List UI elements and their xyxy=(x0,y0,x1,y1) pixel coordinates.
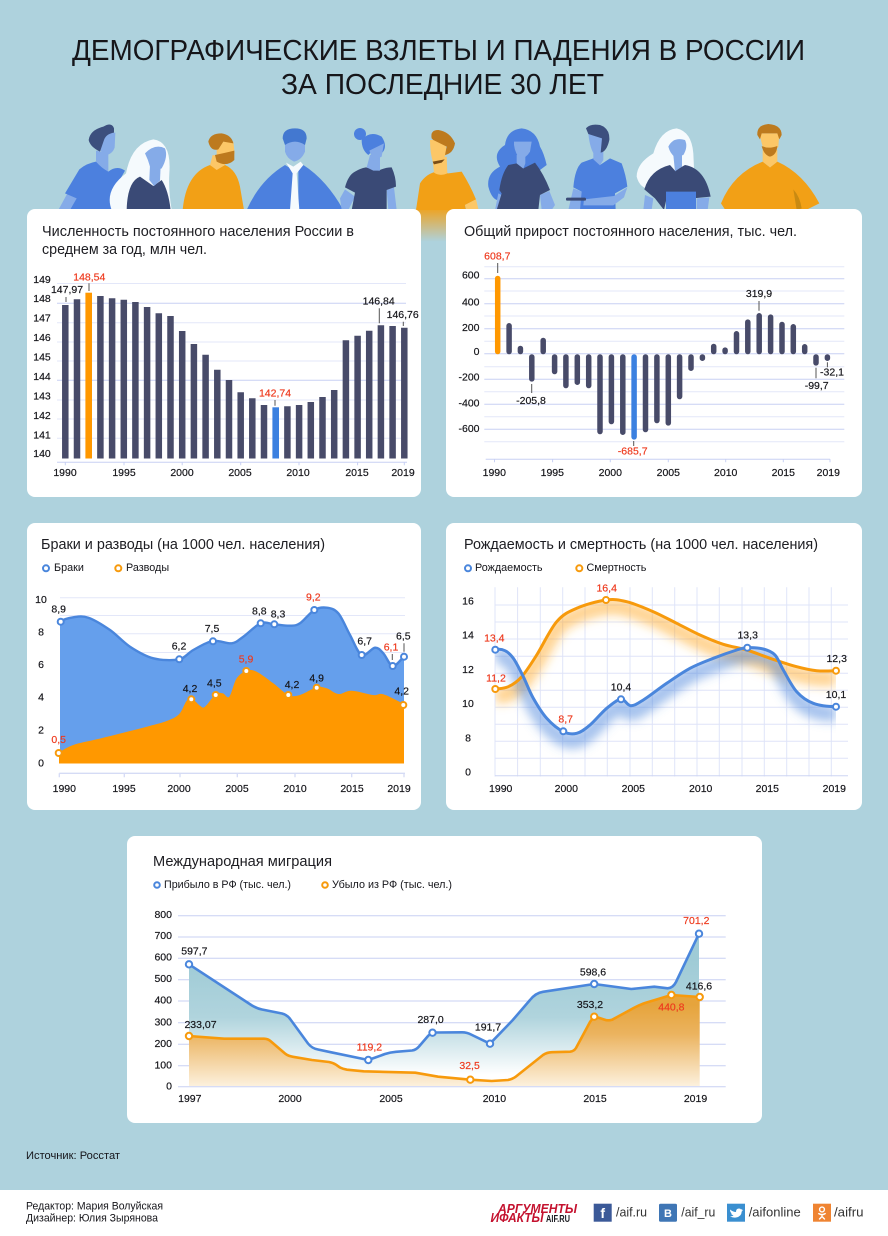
title xyxy=(72,35,805,101)
y axis labels: international migration: 400 xyxy=(154,995,172,1007)
x labels: birth and death rate xyxy=(489,783,846,795)
y axis labels: birth and death rate: 12 xyxy=(462,664,474,676)
legend: birth and death rate xyxy=(465,562,647,574)
y axis labels: population: 143 xyxy=(33,390,51,402)
handle: twitter: /aifonline xyxy=(749,1204,801,1220)
data labels: population: 146,76 xyxy=(387,309,419,321)
data labels: international migration: 597,7 xyxy=(181,946,208,958)
y axis labels: total growth: 400 xyxy=(462,296,480,308)
y axis labels: population: 140 xyxy=(33,448,51,460)
data labels: marriages and divorces: 4,2 xyxy=(285,679,299,691)
bar: 2008 minimum xyxy=(272,407,279,458)
data labels: marriages and divorces: 0,5 xyxy=(51,734,66,746)
y axis labels: international migration: 500 xyxy=(154,973,172,985)
data labels: population: 148,54 xyxy=(73,272,106,284)
y axis labels: total growth: -400 xyxy=(458,397,480,409)
footer xyxy=(0,1190,888,1236)
icon: facebook xyxy=(594,1204,612,1222)
person 2 xyxy=(110,139,172,210)
y axis labels: population: 144 xyxy=(33,371,51,383)
grid: total growth xyxy=(484,267,844,442)
data labels: population: 146,84 xyxy=(363,296,395,308)
x labels: international migration: 1997 xyxy=(178,1093,202,1105)
x labels: population: 1990 xyxy=(53,467,77,479)
x labels: birth and death rate: 2015 xyxy=(756,783,779,795)
data labels: total growth: 319,9 xyxy=(746,288,772,300)
grid: international migration xyxy=(178,916,726,1087)
y axis labels: international migration: 600 xyxy=(154,952,172,964)
y axis labels: population: 141 xyxy=(33,430,51,442)
data labels: birth and death rate: 12,3 xyxy=(826,653,847,665)
x labels: population: 2010 xyxy=(286,467,310,479)
data labels: marriages and divorces: 7,5 xyxy=(205,623,219,635)
data labels: birth and death rate: 13,4 xyxy=(484,632,505,644)
y axis labels: international migration: 100 xyxy=(154,1060,172,1072)
heading: total growth: Общий прирост постоянного населения, тыс. чел. xyxy=(464,224,797,240)
y axis labels: international migration: 700 xyxy=(154,930,172,942)
data labels: marriages and divorces: 4,9 xyxy=(309,672,324,684)
area: arrivals xyxy=(189,934,699,1086)
y axis labels: birth and death rate: 14 xyxy=(462,630,474,642)
y axis labels: population xyxy=(33,274,51,460)
x labels: birth and death rate: 2000 xyxy=(555,783,578,795)
x labels: international migration: 2019 xyxy=(684,1093,707,1105)
person 10 xyxy=(721,124,819,210)
x axis: marriages and divorces xyxy=(59,773,405,777)
y axis labels: population: 146 xyxy=(33,332,51,344)
y axis labels: population: 142 xyxy=(33,410,51,422)
data labels: marriages and divorces xyxy=(51,592,411,746)
legend: marriages and divorces: Браки xyxy=(54,562,84,574)
x labels: marriages and divorces: 2000 xyxy=(167,783,191,795)
x labels: population: 1995 xyxy=(112,467,136,479)
x labels: international migration: 2010 xyxy=(483,1093,506,1105)
data labels: marriages and divorces: 8,3 xyxy=(271,608,285,620)
data labels: marriages and divorces: 5,9 xyxy=(239,653,253,665)
x labels: total growth xyxy=(483,467,840,479)
legend: marriages and divorces xyxy=(43,562,169,574)
icon: vk: В xyxy=(664,1208,672,1220)
person 1 xyxy=(58,125,125,210)
y axis labels: marriages and divorces xyxy=(35,594,47,769)
heading: birth and death rate: Рождаемость и смертность (на 1000 чел. населения) xyxy=(464,537,818,553)
data labels: international migration: 119,2 xyxy=(357,1041,382,1053)
x labels: total growth: 2010 xyxy=(714,467,738,479)
source note: Источник: Росстат xyxy=(26,1150,120,1162)
y axis labels: total growth: 200 xyxy=(462,322,480,334)
data labels: marriages and divorces: 6,5 xyxy=(396,631,411,643)
data labels: international migration: 416,6 xyxy=(686,981,712,993)
data labels: total growth: -32,1 xyxy=(820,367,844,379)
y axis labels: population: 145 xyxy=(33,352,51,364)
data labels: birth and death rate: 13,3 xyxy=(737,629,758,641)
person 7 xyxy=(488,128,555,210)
credits xyxy=(26,1200,163,1224)
x labels: international migration: 2005 xyxy=(379,1093,403,1105)
y axis labels: marriages and divorces: 0 xyxy=(38,757,44,769)
line: arrivals xyxy=(189,934,699,1060)
panel: birth and death rate xyxy=(446,523,862,810)
data labels: international migration: 233,07 xyxy=(184,1019,217,1031)
x labels: marriages and divorces: 2005 xyxy=(225,783,249,795)
data labels: international migration: 191,7 xyxy=(475,1022,501,1034)
x labels: population: 2019 xyxy=(391,467,415,479)
data labels: marriages and divorces: 9,2 xyxy=(306,592,321,604)
x labels: total growth: 2015 xyxy=(772,467,795,479)
legend: marriages and divorces: Разводы xyxy=(126,562,169,574)
handle: odnoklassniki: /aifru xyxy=(834,1204,864,1220)
x labels: total growth: 2005 xyxy=(657,467,680,479)
y axis labels: birth and death rate: 8 xyxy=(465,732,471,744)
legend: international migration: Прибыло в РФ (тыс. чел.) xyxy=(164,879,291,891)
legend: international migration xyxy=(154,879,452,891)
y axis labels: marriages and divorces: 10 xyxy=(35,594,47,606)
x labels: international migration: 2000 xyxy=(278,1093,302,1105)
data labels: population: 142,74 xyxy=(259,388,291,400)
data labels: birth and death rate: 10,4 xyxy=(611,681,631,693)
data labels: total growth: -205,8 xyxy=(516,395,546,407)
data labels: international migration: 32,5 xyxy=(459,1060,480,1072)
x labels: total growth: 1990 xyxy=(483,467,506,479)
x axis: population xyxy=(57,462,407,465)
glow: death rate xyxy=(495,607,836,696)
y axis labels: population: 149 xyxy=(33,274,51,286)
data labels: birth and death rate: 11,2 xyxy=(486,672,506,684)
y axis labels: total growth: 600 xyxy=(462,270,480,282)
x labels: birth and death rate: 2010 xyxy=(689,783,713,795)
grid: marriages and divorces xyxy=(60,598,405,652)
panel: marriages and divorces xyxy=(27,523,421,810)
markers: international migration xyxy=(186,930,703,1083)
credits: Редактор: Мария Волуйская xyxy=(26,1200,163,1212)
area fill: marriages xyxy=(60,607,404,764)
panel: total growth xyxy=(446,209,862,497)
y axis labels: population: 147 xyxy=(33,312,51,324)
bar: 1990 maximum xyxy=(495,278,500,352)
icon: vk xyxy=(659,1204,677,1222)
line: departures xyxy=(189,995,700,1081)
y axis labels: marriages and divorces: 2 xyxy=(38,725,44,737)
credits: Дизайнер: Юлия Зырянова xyxy=(26,1212,158,1224)
x labels: birth and death rate: 2005 xyxy=(622,783,645,795)
data labels: population: 147,97 xyxy=(51,284,83,296)
data labels: marriages and divorces: 4,2 xyxy=(183,683,197,695)
title: ЗА ПОСЛЕДНИЕ 30 ЛЕТ xyxy=(281,69,604,101)
data labels: birth and death rate: 10,1 xyxy=(826,689,846,701)
x labels: population: 2005 xyxy=(228,467,252,479)
data labels: international migration: 287,0 xyxy=(417,1014,444,1026)
x labels: international migration: 2015 xyxy=(583,1093,607,1105)
bars: total growth xyxy=(509,316,827,432)
icon: twitter xyxy=(727,1204,745,1222)
y axis labels: marriages and divorces: 6 xyxy=(38,659,44,671)
bar: 1992 maximum xyxy=(85,293,92,458)
y axis labels: total growth xyxy=(458,270,480,435)
legend: birth and death rate: Рождаемость xyxy=(475,562,543,574)
x labels: population: 2000 xyxy=(170,467,194,479)
heading: population: Численность постоянного населения России в xyxy=(42,224,354,240)
x labels: birth and death rate: 2019 xyxy=(823,783,846,795)
data labels: marriages and divorces: 6,2 xyxy=(172,641,186,653)
data labels: marriages and divorces: 4,5 xyxy=(207,677,222,689)
panel: population xyxy=(27,209,421,497)
y axis labels: marriages and divorces: 4 xyxy=(38,692,44,704)
x labels: marriages and divorces: 2010 xyxy=(283,783,307,795)
data labels: marriages and divorces: 8,9 xyxy=(51,603,66,615)
y axis labels: international migration: 200 xyxy=(154,1038,172,1050)
markers: divorces xyxy=(56,668,406,756)
data labels: total growth: -685,7 xyxy=(618,446,648,458)
bar: 2002 minimum xyxy=(631,357,637,437)
x labels: international migration xyxy=(178,1093,707,1105)
illustration: group of people xyxy=(58,124,819,242)
logo: AIF xyxy=(490,1201,578,1225)
x labels: marriages and divorces: 2019 xyxy=(387,783,411,795)
data labels: birth and death rate: 16,4 xyxy=(596,582,617,594)
heading: marriages and divorces: Браки и разводы (на 1000 чел. населения) xyxy=(41,537,325,553)
data labels: international migration: 353,2 xyxy=(577,999,603,1011)
x labels: total growth: 1995 xyxy=(541,467,564,479)
handle: vk: /aif_ru xyxy=(681,1204,715,1220)
x labels: marriages and divorces: 2015 xyxy=(340,783,364,795)
y axis labels: international migration: 0 xyxy=(166,1081,172,1093)
data labels: marriages and divorces: 6,7 xyxy=(357,636,372,648)
data labels: international migration: 440,8 xyxy=(658,1001,685,1013)
handle: facebook: /aif.ru xyxy=(616,1204,647,1220)
data labels: marriages and divorces: 8,8 xyxy=(252,606,267,618)
y axis labels: international migration: 800 xyxy=(154,909,172,921)
x labels: marriages and divorces: 1990 xyxy=(53,783,76,795)
data labels: international migration: 701,2 xyxy=(683,915,710,927)
area chart: divorces xyxy=(59,670,404,764)
area line: marriages xyxy=(60,607,404,666)
line: birth rate xyxy=(495,648,836,734)
person 5 xyxy=(340,128,397,210)
x labels: total growth: 2000 xyxy=(599,467,622,479)
y axis labels: marriages and divorces: 8 xyxy=(38,626,44,638)
logo: AIF: AIF.RU xyxy=(546,1214,570,1225)
panel: international migration xyxy=(127,836,762,1123)
data labels: marriages and divorces: 4,2 xyxy=(394,686,409,698)
x labels: total growth: 2019 xyxy=(817,467,840,479)
y axis labels: international migration xyxy=(154,909,172,1093)
icon: odnoklassniki xyxy=(813,1204,831,1222)
x labels: marriages and divorces xyxy=(53,783,411,795)
y axis labels: birth and death rate xyxy=(462,596,474,778)
data labels: total growth xyxy=(484,251,844,458)
heading: international migration: Международная миграция xyxy=(153,854,332,870)
markers: birth and death rate xyxy=(492,597,839,734)
y axis labels: population: 148 xyxy=(33,293,51,305)
x labels: birth and death rate: 1990 xyxy=(489,783,513,795)
icon: facebook: f xyxy=(600,1205,605,1221)
person 3 xyxy=(183,133,244,210)
y axis labels: birth and death rate: 0 xyxy=(465,766,471,778)
data labels: total growth: 608,7 xyxy=(484,251,511,263)
grid: birth and death rate xyxy=(495,587,848,776)
legend: birth and death rate: Смертность xyxy=(586,562,647,574)
person 9 xyxy=(637,128,711,210)
y axis labels: international migration: 300 xyxy=(154,1016,172,1028)
data labels: birth and death rate xyxy=(484,582,847,726)
logo: AIF: ИФАКТЫ xyxy=(490,1210,544,1225)
title: ДЕМОГРАФИЧЕСКИЕ ВЗЛЕТЫ И ПАДЕНИЯ В РОССИИ xyxy=(72,35,805,67)
x labels: population xyxy=(53,467,415,479)
data labels: international migration xyxy=(181,915,712,1072)
legend: international migration: Убыло из РФ (тыс. чел.) xyxy=(332,879,452,891)
area: departures xyxy=(189,995,700,1086)
person 6 xyxy=(413,130,479,242)
data labels: population xyxy=(51,272,419,406)
markers: marriages xyxy=(58,607,407,669)
x labels: marriages and divorces: 1995 xyxy=(112,783,136,795)
y axis labels: birth and death rate: 16 xyxy=(462,596,474,608)
bars: population xyxy=(65,296,404,458)
y axis labels: total growth: 0 xyxy=(474,346,480,358)
data labels: marriages and divorces: 6,1 xyxy=(384,642,398,654)
x labels: population: 2015 xyxy=(345,467,369,479)
x axis: total growth xyxy=(486,459,830,462)
data labels: international migration: 598,6 xyxy=(580,967,606,979)
line: death rate xyxy=(495,600,836,689)
data labels: birth and death rate: 8,7 xyxy=(558,714,573,726)
y axis labels: total growth: -600 xyxy=(458,423,480,435)
data labels: total growth: -99,7 xyxy=(805,380,829,392)
logo: AIF: АРГУМЕНТЫ xyxy=(497,1201,578,1216)
heading: population xyxy=(42,224,354,258)
grid: population xyxy=(57,284,406,438)
person 4 xyxy=(247,128,343,210)
heading: population: среднем за год, млн чел. xyxy=(42,242,207,258)
y axis labels: birth and death rate: 10 xyxy=(462,698,474,710)
y axis labels: total growth: -200 xyxy=(458,372,480,384)
glow: birth rate xyxy=(495,655,836,741)
person 8 xyxy=(566,125,627,210)
